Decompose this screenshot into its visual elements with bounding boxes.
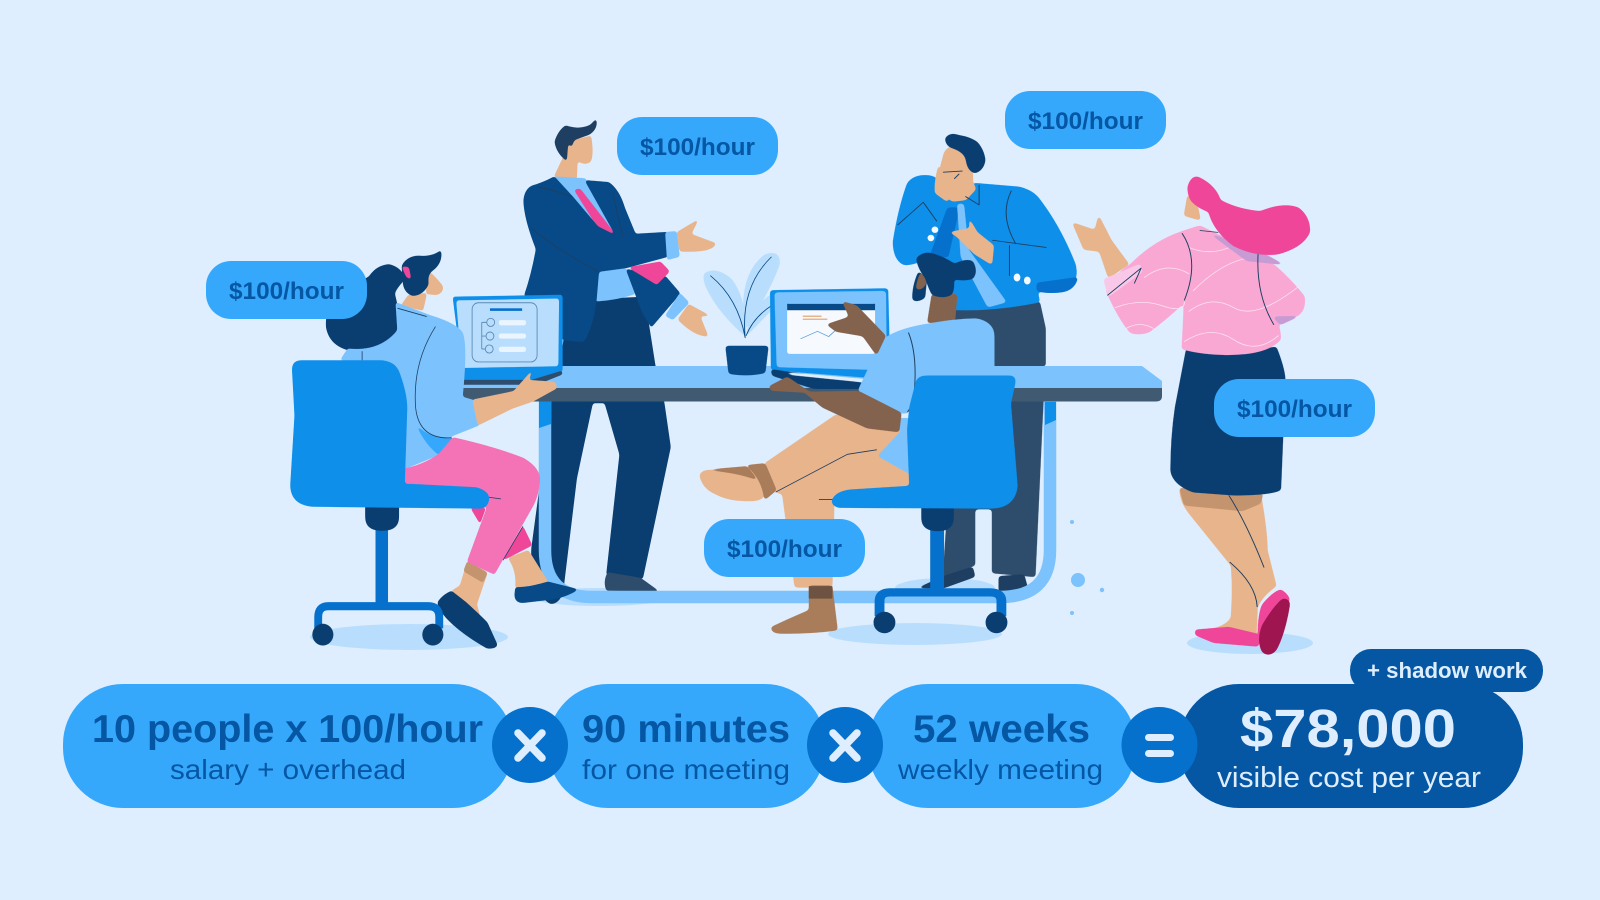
shirt xyxy=(341,303,479,469)
right chair xyxy=(832,376,1017,633)
hand at chin xyxy=(935,166,956,201)
line chart xyxy=(801,321,846,339)
rate badge: seated man xyxy=(704,519,865,577)
left laptop xyxy=(453,295,562,384)
arm xyxy=(1073,216,1129,278)
formula: meeting length: for one meeting xyxy=(582,754,790,785)
formula: meeting length xyxy=(548,684,825,808)
screen xyxy=(787,304,875,354)
legs xyxy=(1180,488,1276,637)
screen xyxy=(457,299,559,368)
hair xyxy=(917,253,975,297)
formula: weeks: 52 weeks xyxy=(913,708,1090,751)
shirt xyxy=(893,176,1076,310)
neck and face xyxy=(401,294,426,310)
hand on tie xyxy=(951,219,993,264)
rate badge: suit man xyxy=(617,117,778,175)
hair top xyxy=(402,251,441,295)
formula: result xyxy=(1179,684,1523,808)
pot xyxy=(726,346,768,375)
formula: people cost: 10 people x 100/hour xyxy=(92,708,483,751)
upper foot xyxy=(700,467,765,501)
seat and back xyxy=(832,376,1017,508)
formula: people cost xyxy=(63,684,513,808)
rate badge: standing woman: $100/hour xyxy=(1237,396,1352,423)
rate badge: seated woman xyxy=(206,261,367,319)
floor shadows xyxy=(310,578,1313,654)
arm xyxy=(473,371,557,425)
tie xyxy=(958,204,1006,307)
table top xyxy=(459,366,1162,402)
trousers xyxy=(605,401,644,577)
arm xyxy=(769,377,901,432)
rate badge: suit man: $100/hour xyxy=(640,134,755,161)
shirt xyxy=(859,319,994,413)
fold shade xyxy=(930,208,959,257)
wheels xyxy=(874,612,895,633)
formula: meeting length: 90 minutes xyxy=(582,708,790,751)
rate badge: blue shirt man xyxy=(1005,91,1166,149)
ponytail xyxy=(913,272,926,301)
formula: result: visible cost per year xyxy=(1217,762,1481,794)
neck xyxy=(928,294,957,323)
jacket xyxy=(524,177,667,342)
knob xyxy=(922,505,953,531)
knob xyxy=(366,504,399,530)
buttons xyxy=(932,227,938,232)
shoes xyxy=(515,582,577,602)
decorative dots xyxy=(1070,520,1104,615)
trousers xyxy=(765,415,910,587)
hair xyxy=(946,134,985,173)
hands xyxy=(677,220,716,251)
wheels xyxy=(312,624,333,645)
standing man in navy suit xyxy=(524,120,716,604)
face xyxy=(939,147,976,201)
seated woman in pink trousers xyxy=(326,251,577,648)
rate badge: standing woman xyxy=(1214,379,1375,437)
standing man in blue shirt xyxy=(893,134,1077,592)
rate badge: seated man: $100/hour xyxy=(727,536,842,563)
formula: weeks: weekly meeting xyxy=(897,754,1103,785)
shoe xyxy=(605,573,659,591)
multiply operator 1 xyxy=(492,707,568,783)
multiply operator 2 xyxy=(807,707,883,783)
seat and back xyxy=(291,361,489,508)
formula: result: $78,000 xyxy=(1240,699,1456,759)
base xyxy=(880,592,1001,616)
rate badge: seated woman: $100/hour xyxy=(229,278,344,305)
lower foot xyxy=(772,586,837,633)
shoes xyxy=(1196,627,1260,646)
lap shirt xyxy=(876,419,930,479)
trousers xyxy=(943,302,1045,577)
leaves xyxy=(704,271,745,336)
trousers xyxy=(403,438,540,574)
shadow work tag xyxy=(1350,649,1543,692)
rate badge: blue shirt man: $100/hour xyxy=(1028,108,1143,135)
seated woman with brown skin xyxy=(700,253,994,633)
far sleeve xyxy=(626,269,680,327)
shirt lower xyxy=(596,269,635,301)
shoes xyxy=(919,567,975,588)
potted plant xyxy=(704,253,779,375)
hair back xyxy=(326,265,405,352)
left chair xyxy=(291,361,489,645)
sweater xyxy=(1106,226,1304,355)
standing woman with pink hair xyxy=(1073,177,1309,654)
equals operator xyxy=(1122,707,1198,783)
shirt collar area xyxy=(554,177,617,238)
tie xyxy=(575,189,616,236)
shadow work tag: + shadow work xyxy=(1367,658,1528,683)
right laptop xyxy=(771,289,890,388)
skirt xyxy=(1171,347,1285,495)
base xyxy=(318,606,439,628)
far leg xyxy=(509,551,548,588)
cuffs xyxy=(666,232,679,259)
face xyxy=(1184,195,1200,220)
hair xyxy=(555,120,596,160)
table frame xyxy=(539,400,1056,597)
pointing hand xyxy=(827,302,885,355)
neck and head xyxy=(554,136,592,179)
formula: weeks xyxy=(868,684,1136,808)
hair xyxy=(1188,177,1309,254)
tie end xyxy=(629,262,669,284)
formula: people cost: salary + overhead xyxy=(170,754,406,785)
sweater pattern xyxy=(1115,246,1300,346)
